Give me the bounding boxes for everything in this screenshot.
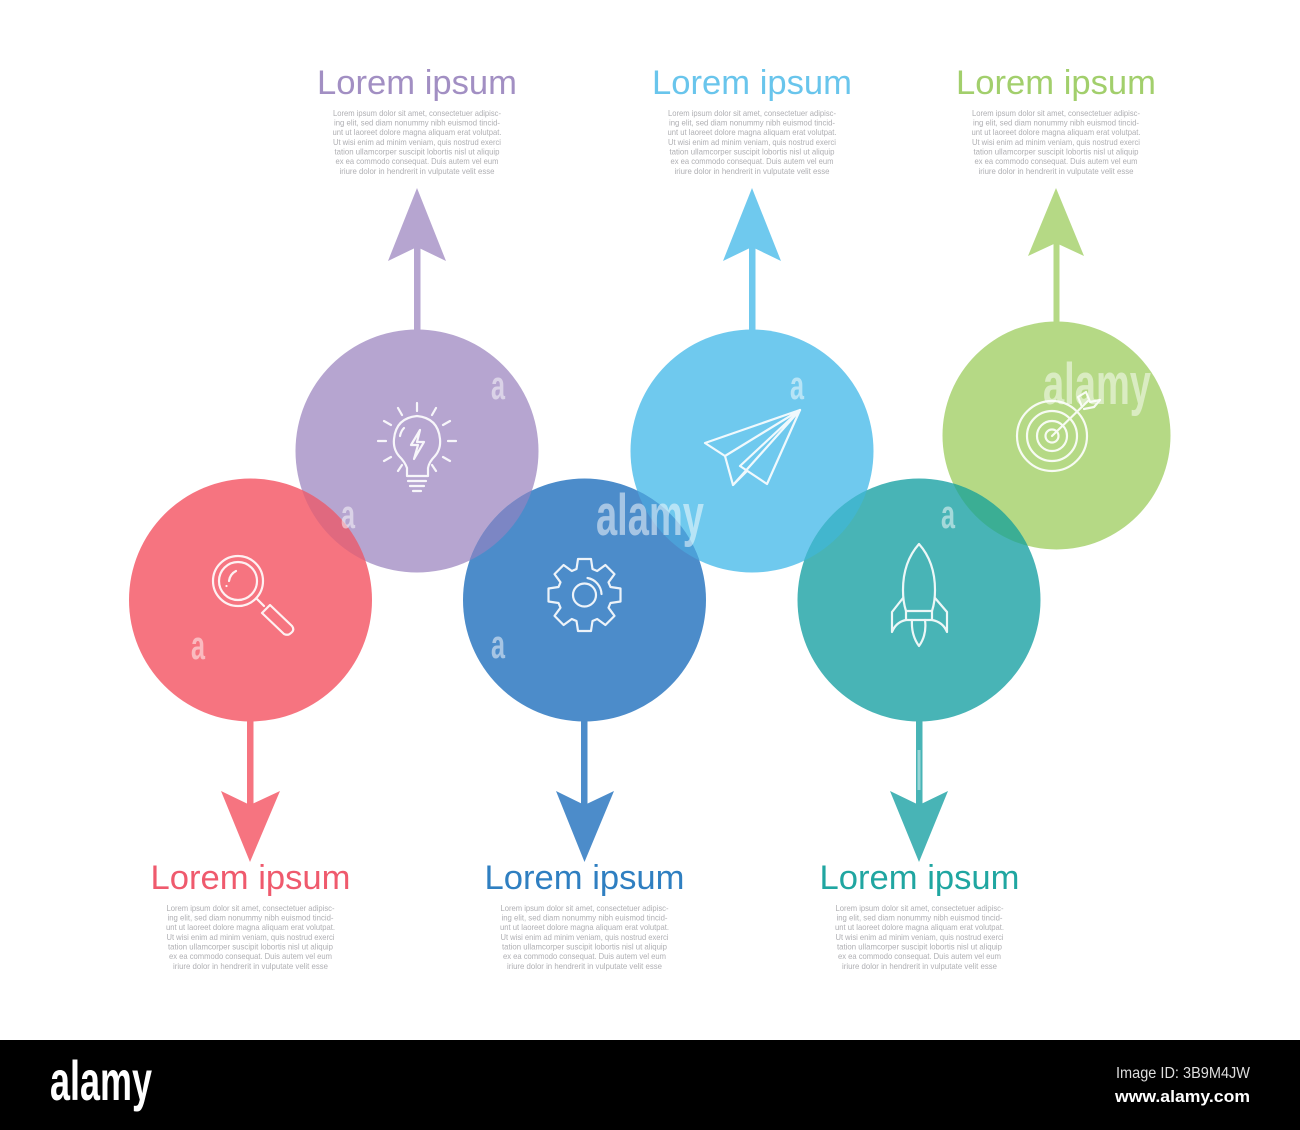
circle: red [129,478,372,722]
body: purple: tation ullamcorper suscipit lobortis nisl ut aliquip [334,148,500,156]
heading: blue: Lorem ipsum [484,859,684,897]
arrow: green up [1028,188,1084,323]
body: sky: ex ea commodo consequat. Duis autem vel eum [670,157,834,166]
body: green: iriure dolor in hendrerit in vulputate velit esse [978,167,1134,176]
watermark: small marks: a [191,624,205,668]
text block: teal [820,859,1020,971]
heading: purple: Lorem ipsum [317,64,517,102]
footer image id: Image ID: 3B9M4JW [1116,1065,1251,1082]
body: green: Ut wisi enim ad minim veniam, quis nostrud exerci [972,138,1140,147]
body: teal: Lorem ipsum dolor sit amet, consectetuer adipisc- [836,904,1004,913]
overlap: red and purple [302,490,366,561]
body: red: ex ea commodo consequat. Duis autem vel eum [169,952,332,961]
body: green: ex ea commodo consequat. Duis autem vel eum [974,157,1138,166]
body: red [166,904,335,971]
watermark: small marks: a [341,493,355,537]
icon: light bulb [378,403,456,491]
heading: sky: Lorem ipsum [652,64,852,102]
body: teal [835,904,1004,971]
watermark [191,352,1151,668]
body: teal: ex ea commodo consequat. Duis autem vel eum [838,952,1001,961]
body: blue: ing elit, sed diam nonummy nibh euismod tincid- [502,914,668,922]
arrow: blue down [556,720,614,862]
watermark: small marks: a [491,364,505,408]
watermark: small marks: a [491,623,505,667]
icon: rocket [892,544,947,646]
body: teal: unt ut laoreet dolore magna aliquam erat volutpat. [835,923,1004,932]
text block: red [150,859,350,971]
text block: purple [317,64,517,176]
footer url: www.alamy.com [1114,1087,1250,1106]
body: blue: Lorem ipsum dolor sit amet, consectetuer adipisc- [500,904,669,913]
text block: green [956,64,1156,176]
overlap: blue and purple [470,491,532,560]
body: green [972,109,1140,176]
watermark: small marks: a [790,364,804,408]
body: purple: Lorem ipsum dolor sit amet, consectetuer adipisc- [333,109,501,118]
body: blue: Ut wisi enim ad minim veniam, quis nostrud exerci [500,933,669,942]
overlap: teal and green [953,484,1028,546]
body: purple: Ut wisi enim ad minim veniam, quis nostrud exerci [333,138,501,147]
circle: green [942,322,1170,550]
body: sky: ing elit, sed diam nonummy nibh euismod tincid- [669,118,835,128]
overlap: blue and sky [637,490,700,560]
body: green: unt ut laoreet dolore magna aliquam erat volutpat. [972,128,1140,137]
body: sky [668,109,836,176]
footer bar [0,1040,1300,1130]
body: red: Ut wisi enim ad minim veniam, quis nostrud exerci [166,933,335,942]
body: teal: tation ullamcorper suscipit lobortis nisl ut aliquip [837,942,1002,952]
body: blue: ex ea commodo consequat. Duis autem vel eum [503,952,666,961]
circle: blue [463,478,706,722]
text block: sky [652,64,852,176]
circle: teal [798,478,1040,722]
body: red: unt ut laoreet dolore magna aliquam erat volutpat. [166,923,335,932]
body: purple: ex ea commodo consequat. Duis autem vel eum [336,157,499,166]
circles with overlaps [129,322,1170,722]
arrow: red down [221,720,280,862]
icon: paper plane [705,410,800,485]
heading: green: Lorem ipsum [956,64,1156,102]
watermark: small marks [191,364,955,668]
body: red: ing elit, sed diam nonummy nibh euismod tincid- [168,914,334,922]
body: purple: unt ut laoreet dolore magna aliquam erat volutpat. [332,128,502,137]
arrow: purple up [388,188,446,331]
body: purple [332,109,502,176]
heading: red: Lorem ipsum [150,859,350,897]
body: purple: iriure dolor in hendrerit in vulputate velit esse [340,167,495,176]
circle: sky blue [630,330,874,572]
watermark: center logo: alamy [596,483,704,548]
body: blue: iriure dolor in hendrerit in vulputate velit esse [507,962,662,971]
circle: purple [296,330,538,572]
body: blue: unt ut laoreet dolore magna aliquam erat volutpat. [500,923,669,932]
body: teal: iriure dolor in hendrerit in vulputate velit esse [842,962,997,971]
body: red: iriure dolor in hendrerit in vulputate velit esse [173,962,328,971]
body: purple: ing elit, sed diam nonummy nibh euismod tincid- [334,118,500,128]
arrow: sky up [723,188,781,331]
body: blue [500,904,669,971]
body: green: tation ullamcorper suscipit lobortis nisl ut aliquip [974,148,1139,156]
heading: teal: Lorem ipsum [820,859,1020,897]
footer logo: alamy [50,1049,152,1112]
body: sky: Lorem ipsum dolor sit amet, consectetuer adipisc- [668,109,836,118]
watermark: small marks: a [941,493,955,537]
body: sky: tation ullamcorper suscipit lobortis nisl ut aliquip [670,148,835,156]
body: blue: tation ullamcorper suscipit lobortis nisl ut aliquip [502,942,667,952]
overlap: teal and sky [804,490,867,560]
icon: magnifying glass [213,556,293,635]
icon: gear [548,559,620,631]
arrow: teal down [890,720,948,862]
text block: blue [484,859,684,971]
body: green: ing elit, sed diam nonummy nibh euismod tincid- [973,118,1139,128]
body: red: tation ullamcorper suscipit lobortis nisl ut aliquip [168,942,333,952]
watermark: green circle logo: alamy [1043,352,1151,417]
body: sky: Ut wisi enim ad minim veniam, quis nostrud exerci [668,138,836,147]
body: red: Lorem ipsum dolor sit amet, consectetuer adipisc- [166,904,335,913]
body: sky: unt ut laoreet dolore magna aliquam erat volutpat. [668,128,836,137]
body: sky: iriure dolor in hendrerit in vulputate velit esse [674,167,830,176]
body: green: Lorem ipsum dolor sit amet, consectetuer adipisc- [972,109,1140,118]
icon: target with arrow [1017,392,1100,471]
body: teal: ing elit, sed diam nonummy nibh euismod tincid- [836,914,1003,922]
body: teal: Ut wisi enim ad minim veniam, quis nostrud exerci [836,933,1004,942]
